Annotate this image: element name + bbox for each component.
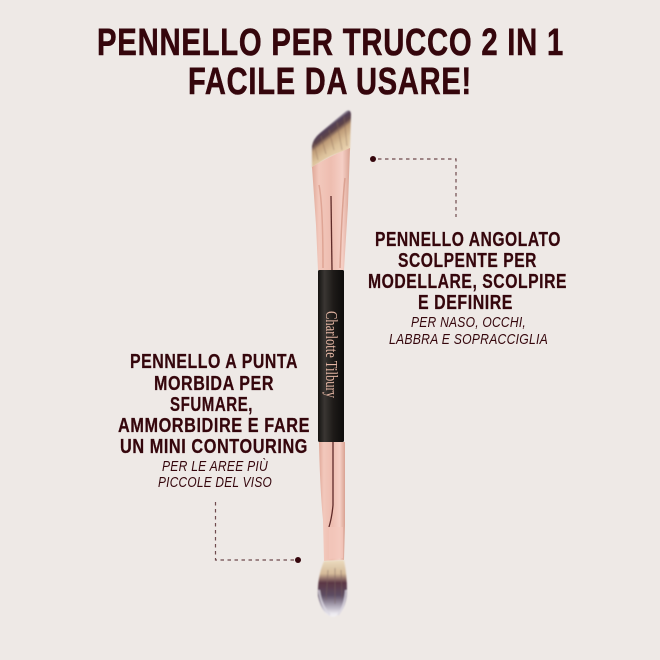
callout text: soft tip brush: PER LE AREE PIÙ: [162, 458, 268, 475]
lower rose gold ferrule: [319, 442, 345, 561]
rounded bristles: [318, 560, 347, 617]
callout text: soft tip brush: [118, 351, 310, 491]
angled bristles: [312, 110, 351, 168]
callout text: angled brush: PENNELLO ANGOLATO: [375, 229, 561, 251]
callout text: angled brush: PER NASO, OCCHI,: [411, 314, 526, 331]
callout: soft tip brush leader line: [216, 502, 301, 563]
callout text: soft tip brush: PICCOLE DEL VISO: [158, 474, 272, 491]
handle logo: Charlotte Tilbury: [322, 311, 341, 398]
callout text: angled brush: MODELLARE, SCOLPIRE: [368, 271, 567, 293]
title: FACILE DA USARE!: [188, 61, 472, 103]
callout text: soft tip brush: SFUMARE,: [170, 394, 253, 416]
callout text: angled brush: E DEFINIRE: [418, 292, 513, 314]
callout text: angled brush: [368, 229, 567, 348]
callout text: soft tip brush: MORBIDA PER: [154, 373, 274, 395]
callout text: soft tip brush: PENNELLO A PUNTA: [130, 351, 298, 373]
title: [97, 22, 564, 103]
callout: angled brush leader line: [370, 156, 456, 217]
callout text: soft tip brush: AMMORBIDIRE E FARE: [118, 415, 310, 437]
brush illustration: [312, 110, 351, 617]
callout text: angled brush: SCOLPENTE PER: [398, 250, 537, 272]
black handle: [318, 270, 344, 442]
callout text: soft tip brush: UN MINI CONTOURING: [120, 436, 308, 458]
callout text: angled brush: LABBRA E SOPRACCIGLIA: [389, 331, 548, 348]
upper rose gold ferrule: [312, 148, 350, 270]
